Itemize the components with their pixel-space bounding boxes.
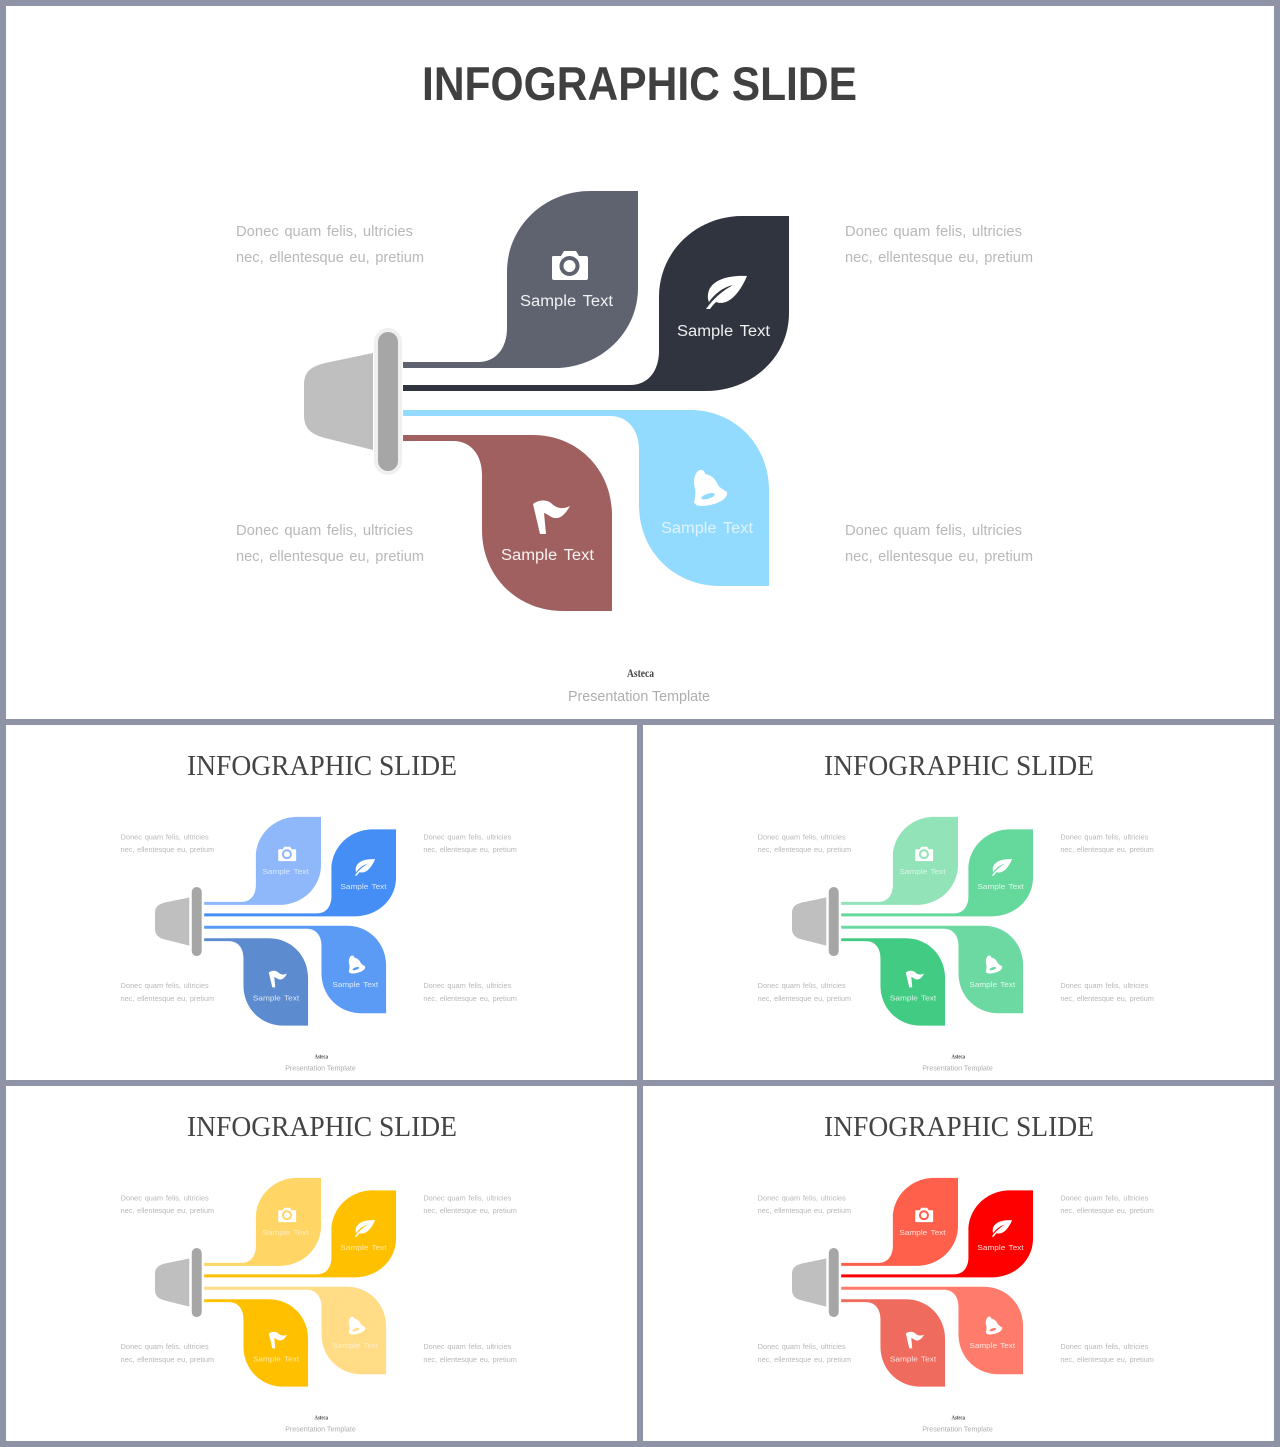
- petal: bell: Sample Text: [661, 520, 754, 537]
- diagram: Donec quam felis, ultricies: [758, 832, 846, 841]
- diagram: nec, ellentesque eu, pretium: [423, 994, 517, 1003]
- diagram: Sample Text: [262, 1228, 309, 1237]
- panel: blue variant: [6, 725, 637, 1080]
- diagram: Sample Text: [262, 867, 309, 876]
- text block: top left: nec, ellentesque eu, pretium: [236, 249, 424, 266]
- diagram: Asteca: [952, 1415, 965, 1421]
- diagram: Sample Text: [253, 993, 300, 1002]
- heading: INFOGRAPHIC SLIDE: [824, 1111, 1094, 1143]
- text block: top right: nec, ellentesque eu, pretium: [845, 249, 1033, 266]
- panel: green variant: [643, 725, 1274, 1080]
- heading: INFOGRAPHIC SLIDE: [824, 750, 1094, 782]
- diagram: Asteca: [315, 1415, 328, 1421]
- diagram: nec, ellentesque eu, pretium: [121, 1206, 214, 1215]
- diagram: Donec quam felis, ultricies: [758, 1342, 846, 1351]
- diagram: Donec quam felis, ultricies: [423, 1193, 512, 1202]
- diagram: Donec quam felis, ultricies: [1060, 1342, 1149, 1351]
- panel: yellow variant: [6, 1086, 637, 1441]
- diagram: Donec quam felis, ultricies: [758, 981, 846, 990]
- text block: bottom right: nec, ellentesque eu, pretium: [845, 548, 1033, 565]
- diagram: nec, ellentesque eu, pretium: [121, 1355, 214, 1364]
- diagram: Sample Text: [332, 1341, 379, 1350]
- diagram: nec, ellentesque eu, pretium: [1060, 1355, 1154, 1364]
- diagram: [758, 1178, 1154, 1433]
- diagram: [758, 817, 1154, 1072]
- text block: top right: Donec quam felis, ultricies: [845, 223, 1022, 240]
- diagram: Presentation Template: [285, 1424, 356, 1433]
- diagram: Donec quam felis, ultricies: [423, 832, 512, 841]
- diagram: nec, ellentesque eu, pretium: [758, 845, 851, 854]
- diagram: Sample Text: [969, 980, 1016, 989]
- diagram: Presentation Template: [922, 1063, 993, 1072]
- footer: Asteca: [627, 666, 654, 680]
- heading: INFOGRAPHIC SLIDE: [187, 1111, 457, 1143]
- footer: Presentation Template: [568, 688, 710, 705]
- text block: bottom right: [845, 522, 1033, 565]
- text block: bottom left: [236, 522, 424, 565]
- diagram: nec, ellentesque eu, pretium: [423, 845, 517, 854]
- diagram: Sample Text: [977, 882, 1025, 891]
- diagram: Sample Text: [340, 882, 388, 891]
- text block: bottom left: Donec quam felis, ultricies: [236, 522, 413, 539]
- title: INFOGRAPHIC SLIDE: [422, 57, 857, 110]
- petal: camera: [403, 191, 638, 368]
- diagram: [121, 1178, 517, 1433]
- diagram: Asteca: [952, 1054, 965, 1060]
- petal: flag: [403, 435, 612, 611]
- diagram: Donec quam felis, ultricies: [121, 1193, 209, 1202]
- diagram: Sample Text: [890, 993, 937, 1002]
- diagram: Sample Text: [977, 1243, 1025, 1252]
- diagram: nec, ellentesque eu, pretium: [121, 845, 214, 854]
- diagram: Donec quam felis, ultricies: [423, 1342, 512, 1351]
- diagram: Donec quam felis, ultricies: [1060, 981, 1149, 990]
- footer: [568, 666, 710, 705]
- funnel icon: [304, 328, 402, 475]
- heading: INFOGRAPHIC SLIDE: [187, 750, 457, 782]
- text block: bottom right: Donec quam felis, ultricies: [845, 522, 1022, 539]
- text block: top left: Donec quam felis, ultricies: [236, 223, 413, 240]
- diagram: nec, ellentesque eu, pretium: [758, 1206, 851, 1215]
- diagram: Donec quam felis, ultricies: [1060, 1193, 1149, 1202]
- text block: top right: [845, 223, 1033, 266]
- diagram: nec, ellentesque eu, pretium: [423, 1206, 517, 1215]
- diagram: Sample Text: [899, 1228, 946, 1237]
- diagram: Donec quam felis, ultricies: [1060, 832, 1149, 841]
- panel: main slide: [6, 6, 1274, 719]
- diagram: Presentation Template: [285, 1063, 356, 1072]
- diagram: [121, 817, 517, 1072]
- petal: leaf: [403, 216, 789, 391]
- diagram: Sample Text: [340, 1243, 388, 1252]
- diagram: nec, ellentesque eu, pretium: [423, 1355, 517, 1364]
- diagram: nec, ellentesque eu, pretium: [1060, 994, 1154, 1003]
- diagram: Sample Text: [899, 867, 946, 876]
- diagram: nec, ellentesque eu, pretium: [758, 994, 851, 1003]
- petal: camera: Sample Text: [520, 293, 614, 310]
- diagram: nec, ellentesque eu, pretium: [121, 994, 214, 1003]
- text block: top left: [236, 223, 424, 266]
- diagram: Donec quam felis, ultricies: [121, 1342, 209, 1351]
- petal: bell: [403, 410, 769, 586]
- diagram: Donec quam felis, ultricies: [758, 1193, 846, 1202]
- petal: flag: Sample Text: [501, 547, 595, 564]
- diagram: Sample Text: [253, 1354, 300, 1363]
- diagram: Sample Text: [890, 1354, 937, 1363]
- petal: leaf: Sample Text: [677, 323, 771, 340]
- diagram: Donec quam felis, ultricies: [423, 981, 512, 990]
- diagram: nec, ellentesque eu, pretium: [758, 1355, 851, 1364]
- panel: red variant: [643, 1086, 1274, 1441]
- diagram: Sample Text: [969, 1341, 1016, 1350]
- diagram: Asteca: [315, 1054, 328, 1060]
- diagram: nec, ellentesque eu, pretium: [1060, 1206, 1154, 1215]
- diagram: nec, ellentesque eu, pretium: [1060, 845, 1154, 854]
- diagram: Presentation Template: [922, 1424, 993, 1433]
- text block: bottom left: nec, ellentesque eu, pretium: [236, 548, 424, 565]
- diagram: Donec quam felis, ultricies: [121, 981, 209, 990]
- diagram: Sample Text: [332, 980, 379, 989]
- diagram: Donec quam felis, ultricies: [121, 832, 209, 841]
